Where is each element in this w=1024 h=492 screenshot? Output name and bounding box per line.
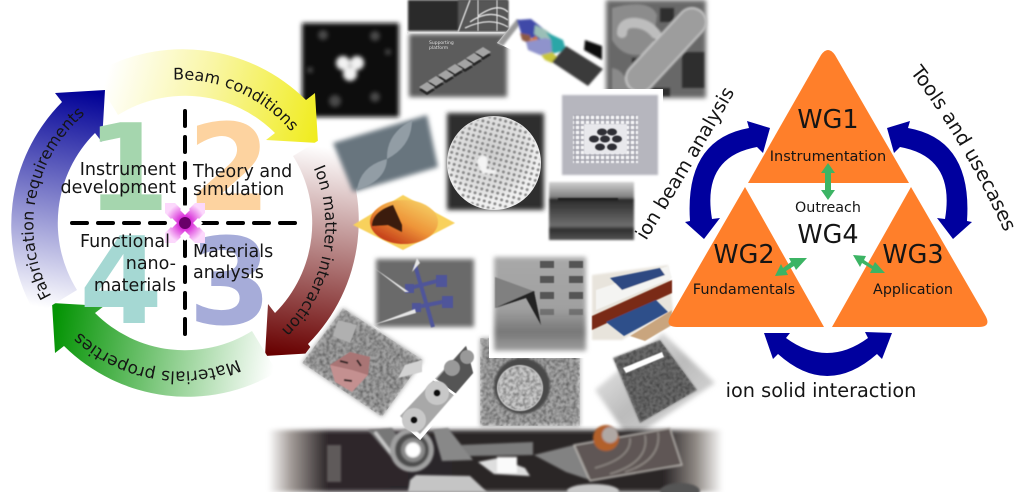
label: ion beam analysis: ion beam analysis [634,88,734,240]
quadrant label: instrument development: development [61,178,176,198]
number 2: 2 [187,100,271,239]
triangle: WG2 [669,187,824,327]
photo: SEM cantilever row: platform [429,45,448,51]
photo: ring apertures strip [397,343,475,438]
arrow: ion solid interaction cycle [764,332,892,376]
label: Outreach: Outreach [795,200,861,216]
quadrant label: materials analysis: Materials [193,242,273,262]
quadrant label: functional nanomaterials: materials [94,276,176,296]
arrow: ion beam analysis cycle [685,121,770,239]
number 1: 1 [86,100,170,239]
arrow label: fabrication requirements: Fabrication requirements [21,108,84,300]
quadrant label: materials analysis: analysis [193,263,264,283]
arrow: beam conditions [93,49,318,143]
photo: vacuum chamber interior [268,425,723,492]
quadrant label: functional nanomaterials: nano- [126,254,176,274]
photo: waveguide SEM [333,115,438,192]
quadrant label: instrument development: Instrument [80,160,176,180]
quadrant label: functional nanomaterials: Functional [80,232,170,252]
photo: pillar in pit [475,333,584,431]
arrow: fabrication requirements [11,90,105,315]
photo: coloured grain map strip [497,15,603,86]
label: Tools and usecases: Tools and usecases [913,63,1014,231]
arrow label: beam conditions: Beam conditions [174,68,297,130]
quadrant label: theory and simulation: simulation [193,180,284,200]
arrow: WG2 to WG4 [775,258,807,276]
photo: SEM cantilever row [407,32,509,97]
photo: photonic crystal [556,89,663,179]
panel: cyclic research diagram [11,49,359,397]
photo: layer stack cross-section [549,182,634,240]
label: WG2: WG2 [713,240,775,270]
panel: working groups triangle [634,50,1014,402]
quadrant cross [72,111,298,337]
triangle: WG3 [832,187,987,327]
photo: cube on substrate [298,305,427,420]
arrow label: ion matter interaction: Ion matter interaction [282,164,337,334]
label: Application: Application [873,282,953,298]
triangle: WG1 [748,50,909,183]
photo: orange height map [353,195,455,250]
quadrant label: theory and simulation: Theory and [192,162,292,182]
arrow: ion matter interaction [265,131,359,356]
label: Instrumentation: Instrumentation [770,149,886,165]
photo: cross-shaped device [373,258,474,327]
photo: circuit boards [592,265,673,341]
photo: SEM cantilever row: Supporting [429,40,454,46]
label: Fundamentals: Fundamentals [693,282,795,298]
photo: SEM curved gratings [408,0,508,32]
arrow: WG1 to WG4 [821,163,835,200]
arrow label: materials properties: Materials properties [74,334,241,384]
arrow: materials properties [52,303,277,397]
arrow: WG3 to WG4 [853,255,885,273]
label: WG4: WG4 [797,220,859,250]
number 4: 4 [79,213,163,352]
photo: bacteria SEM [606,0,706,98]
label: ion solid interaction: ion solid interaction [726,379,916,402]
central burst [165,203,205,243]
label: WG3: WG3 [882,240,944,270]
photo: angled trench SEM [595,333,715,440]
number 3: 3 [188,214,272,353]
photo: cantilever over pads [489,252,591,358]
arrow: tools and usecases cycle [887,121,972,239]
label: WG1: WG1 [797,105,859,135]
photo: diatom sphere [447,113,544,210]
photo: diffraction pattern [302,23,399,117]
